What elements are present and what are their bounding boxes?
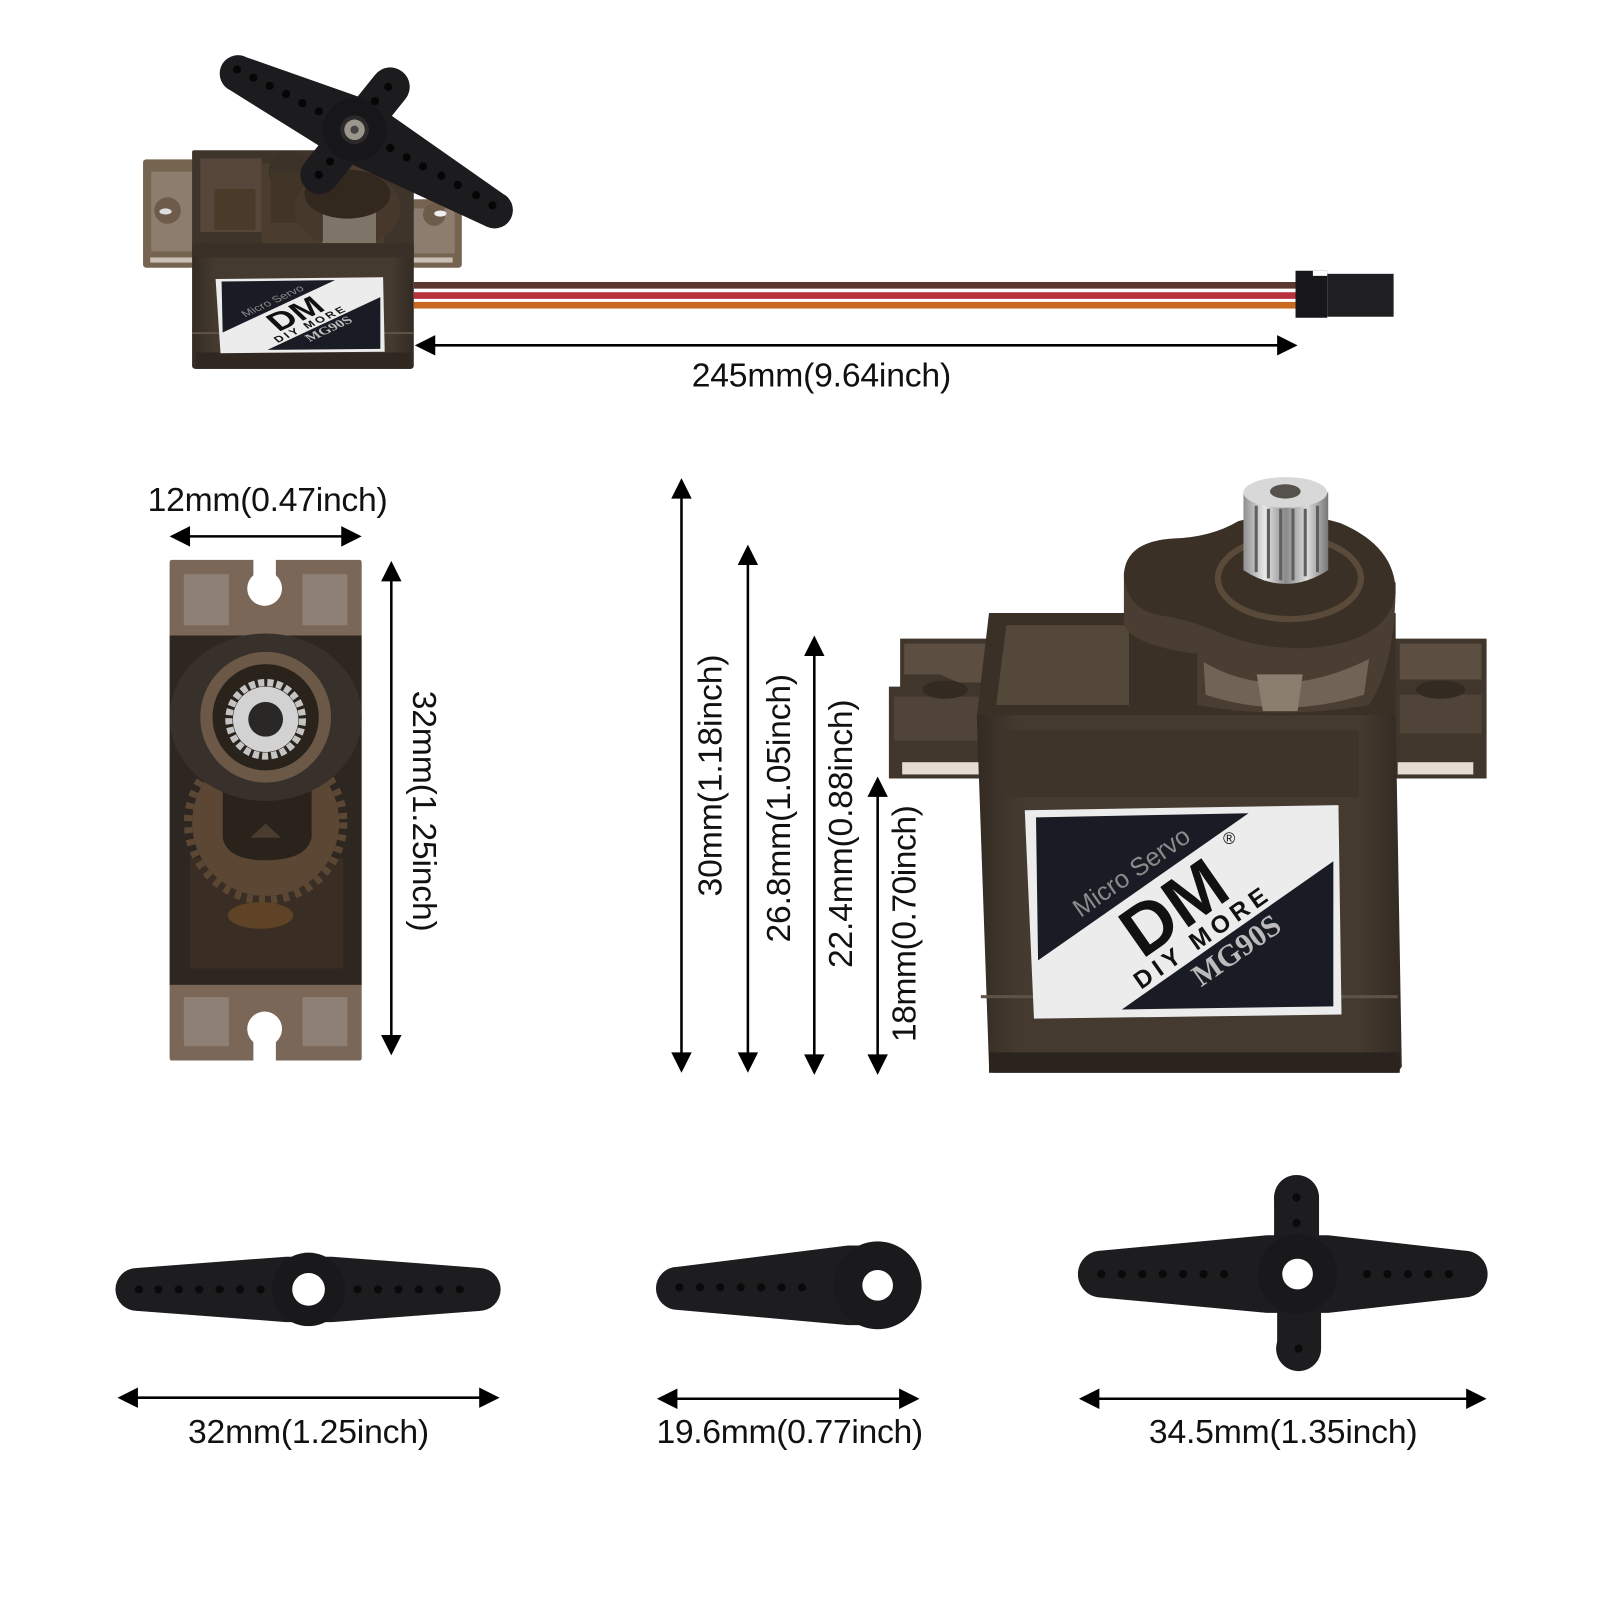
tab highlights (184, 574, 347, 1046)
product label: ® (1223, 830, 1235, 848)
metal output spline (1243, 477, 1328, 584)
case top (192, 150, 414, 245)
dimension: single arm length: 19.6mm(0.77inch) (656, 1413, 923, 1451)
product label: DM (1106, 843, 1243, 973)
output cam with lobe (170, 633, 362, 860)
internal gear (188, 745, 343, 900)
dimension: height to mounting tab (867, 777, 923, 1075)
case front (977, 715, 1402, 1073)
rear case panel (190, 858, 343, 969)
end view: servo from above (170, 560, 362, 1061)
dimension: servo length (381, 561, 443, 1055)
dimension: cross arm length (1079, 1389, 1487, 1451)
product label, top view: Micro Servo (239, 284, 307, 319)
case body (170, 636, 362, 985)
top view: servo with horn and cable (143, 55, 1394, 369)
right mounting tab (1395, 639, 1487, 779)
output cam top face (1124, 515, 1396, 648)
cross servo arm (1078, 1175, 1488, 1371)
double servo arm (115, 1253, 501, 1326)
product label (1025, 805, 1342, 1019)
cable connector (1296, 271, 1394, 318)
dimension: total height (671, 478, 729, 1073)
left mounting tab (889, 639, 989, 779)
dimension: double arm length (117, 1387, 500, 1451)
product label: Micro Servo (1068, 822, 1196, 923)
product label, top view: MG90S (302, 314, 357, 345)
dimension: servo width: 12mm(0.47inch) (148, 481, 388, 519)
dimension: double arm length: 32mm(1.25inch) (188, 1413, 429, 1451)
dimension: single arm length (656, 1389, 923, 1451)
rust coloured spot (228, 902, 293, 929)
upper mounting tab with slot (170, 560, 362, 636)
right mounting tab (412, 199, 462, 268)
product label: MG90S (1186, 908, 1287, 993)
single servo arm (656, 1241, 922, 1329)
dimension: height to gear top (738, 545, 798, 1073)
case front (192, 243, 414, 369)
metal output spline (229, 683, 302, 756)
lower mounting tab with slot (170, 985, 362, 1061)
output gear and cam side (1124, 572, 1396, 713)
side view: main servo photo illustration (889, 477, 1487, 1073)
case top plate (977, 613, 1396, 717)
dimension: height to case top (804, 636, 860, 1075)
product label, top view: DIY MORE (272, 304, 350, 345)
output gear tower (269, 151, 401, 249)
dimension: cable length: 245mm(9.64inch) (692, 357, 951, 395)
dimension: total height: 30mm(1.18inch) (691, 654, 729, 897)
cable: brown, red and orange wires (414, 282, 1298, 309)
product label, top view: DM (259, 291, 332, 337)
product label, top view (216, 277, 385, 353)
dimension: servo length: 32mm(1.25inch) (405, 691, 443, 932)
left mounting tab (143, 159, 194, 268)
product label: DIY MORE (1129, 880, 1277, 995)
dimension: height to gear top: 26.8mm(1.05inch) (760, 674, 798, 943)
servo horn on shaft (220, 55, 513, 228)
dimension: cable length (415, 335, 1298, 395)
dimension: cross arm length: 34.5mm(1.35inch) (1149, 1413, 1418, 1451)
dimension: height to case top: 22.4mm(0.88inch) (822, 699, 860, 968)
cam ring (1218, 537, 1361, 619)
dimension: servo width (148, 481, 388, 547)
dimension: height to mounting tab: 18mm(0.70inch) (885, 805, 923, 1042)
